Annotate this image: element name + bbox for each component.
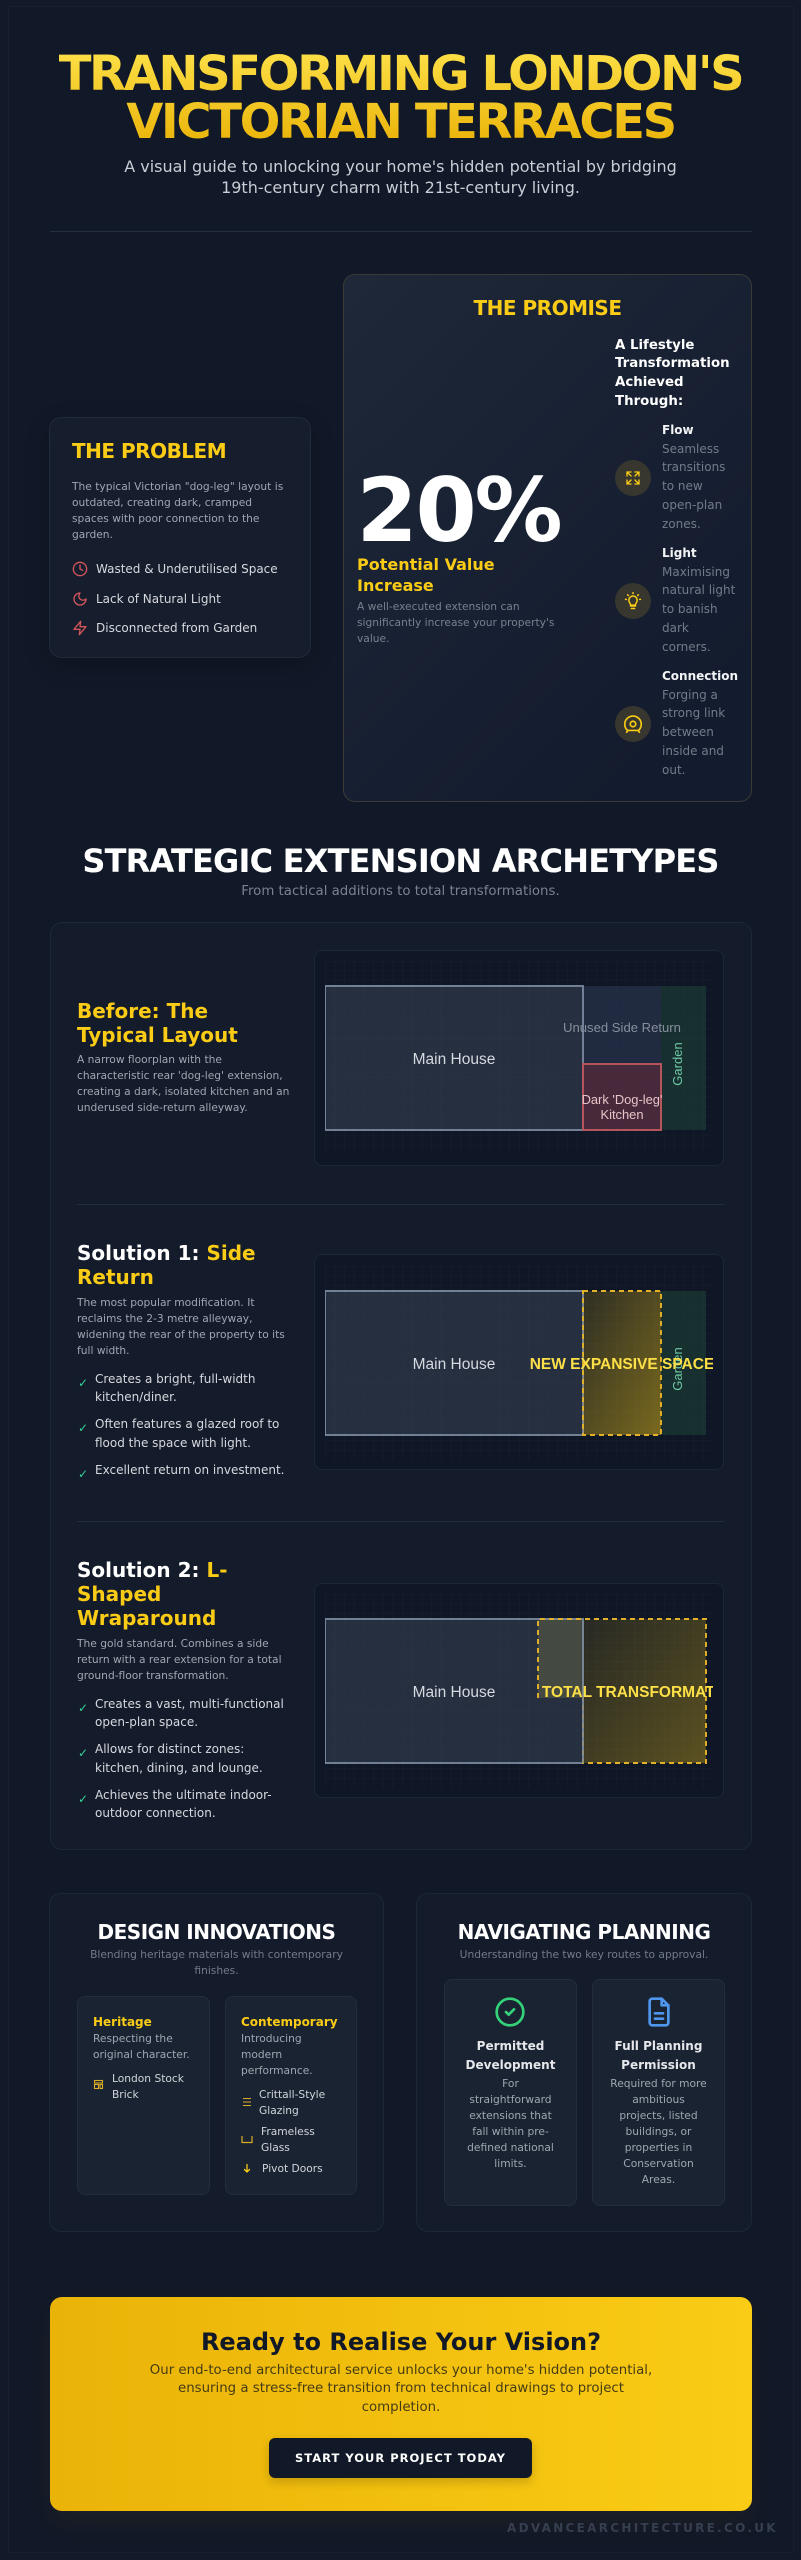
check item: Achieves the ultimate indoor- [95,1788,272,1802]
check item [78,1417,279,1450]
unused side return [583,986,661,1130]
heading: the promise: THE PROMISE [474,296,621,320]
panel: the problem [49,417,311,658]
header [59,46,742,197]
benefit text: inside and [662,744,724,758]
main house [325,1619,583,1763]
title: VICTORIAN TERRACES [126,94,675,150]
archetype description: creating a dark, isolated kitchen and an [77,1085,289,1098]
icon: clock [72,562,88,576]
button label: START YOUR PROJECT TODAY [295,2451,506,2465]
statistic description [357,600,554,645]
problem description [72,480,283,541]
card text: performance. [241,2064,313,2077]
label: main house: Main House [413,1684,495,1701]
label [261,2124,315,2156]
benefit text: zones. [662,517,701,531]
CTA text: completion. [362,2400,440,2415]
card heading: Permitted [477,2039,544,2053]
benefit text [662,546,736,654]
benefit text: dark [662,621,689,635]
problem item: disconnected [73,620,257,636]
statistic description: significantly increase your property's [357,616,554,629]
benefit text: Forging a [662,688,718,702]
archetype description: return with a rear extension for a total [77,1653,282,1666]
card heading: Permission [621,2058,696,2072]
benefit list [78,1372,284,1481]
label: Glass [261,2141,290,2154]
card heading: Contemporary [241,2015,338,2029]
archetype heading: Wraparound [77,1606,216,1630]
check item: Creates a vast, multi-functional [95,1697,284,1711]
archetype: solution 1 [76,1241,285,1481]
card text: straightforward [469,2093,552,2106]
archetype description: reclaims the 2-3 metre alleyway, [77,1312,252,1325]
CTA heading: Ready to Realise Your Vision? [201,2328,601,2356]
card text [593,2076,724,2188]
benefit text: between [662,725,714,739]
CTA button [269,2438,532,2478]
statistic label [357,555,495,595]
card: full planning permission [592,1979,725,2206]
title [0,50,801,146]
label: main house: Main House [413,1051,495,1068]
heading: NAVIGATING PLANNING [458,1920,710,1944]
card text: modern [241,2048,282,2061]
benefit text: transitions [662,460,725,474]
archetype description: ground-floor transformation. [77,1669,229,1682]
footer credit: ADVANCEARCHITECTURE.CO.UK [507,2521,778,2535]
CTA text: Our end-to-end architectural service unlocks your home's hidden potential, [150,2362,652,2378]
heading: DESIGN INNOVATIONS [98,1920,335,1944]
material: pivot [241,2161,351,2177]
archetype heading [77,1558,228,1630]
card heading [593,2037,724,2074]
archetype heading: Before: The [77,999,208,1023]
benefit text: open-plan [662,498,722,512]
subtitle [124,157,677,197]
icon: moon [73,592,87,606]
card text: fall within pre- [472,2125,549,2138]
label: new space: NEW EXPANSIVE SPACE [530,1356,713,1373]
archetype heading: Solution 1: Side [77,1241,256,1265]
icon: check circle [494,1996,526,2028]
check item: outdoor connection. [95,1806,216,1820]
label: London Stock [112,2072,184,2085]
label: kitchen: Dark 'Dog-leg' [582,1092,662,1107]
subheading: From tactical additions to total transformations. [241,884,560,899]
card heading [445,2037,576,2074]
label: main house: Main House [413,1356,495,1373]
benefit text [662,423,725,531]
check item: flood the space with light. [95,1436,251,1450]
archetype heading: Shaped [77,1582,161,1606]
label: garden: Garden [670,1042,685,1086]
card text: Respecting the [93,2032,173,2045]
problem description: The typical Victorian "dog-leg" layout is [72,480,283,493]
main house [325,986,583,1130]
icon: lines [242,2097,252,2107]
icon: brick [94,2080,104,2090]
label: unused side return: Unused Side Return [563,1020,681,1035]
lifestyle heading [615,338,730,409]
archetype heading [77,1241,256,1289]
check item: ✓ [78,1701,88,1715]
card text: Required for more [610,2077,707,2090]
floorplan diagram: solution 2 [314,1583,724,1798]
card text: Areas. [642,2173,675,2186]
lifestyle heading: Transformation [615,356,730,371]
statistic label: Potential Value [357,555,495,574]
card heading: Heritage [93,2015,152,2029]
problem description: outdated, creating dark, cramped [72,496,252,509]
archetype: before [77,999,289,1114]
benefit text: strong link [662,706,725,720]
archetype heading: Return [77,1265,154,1289]
new side extension [583,1291,661,1435]
archetype description: widening the rear of the property to its [77,1328,285,1341]
heading text: STRATEGIC EXTENSION ARCHETYPES [82,842,719,880]
garden [661,986,706,1130]
check item: ✓ [78,1746,88,1760]
benefit: connection [615,669,738,777]
benefit text: Light [662,546,697,560]
label: Disconnected from Garden [96,621,257,635]
label: Crittall-Style [259,2088,325,2101]
icon: document [643,1996,675,2028]
card: permitted development [444,1979,577,2206]
subtitle: 19th-century charm with 21st-century living. [221,178,580,197]
card text [445,2076,576,2172]
heading: the problem: THE PROBLEM [72,439,226,463]
label: Brick [112,2088,139,2101]
card text: Introducing [241,2032,302,2045]
icon: arrow [242,2163,252,2174]
benefit text: Flow [662,423,694,437]
check item: Excellent return on investment. [95,1463,284,1477]
problem item: lack of light [73,592,221,606]
check item: Often features a glazed roof to [95,1417,279,1431]
icon: expand arrows [615,460,651,496]
lifestyle heading: A Lifestyle [615,338,694,352]
benefit text: to banish [662,602,718,616]
card text: buildings, or [626,2125,691,2138]
statistic description: A well-executed extension can [357,600,520,613]
check item: Creates a bright, full-width [95,1372,255,1386]
statistic label: Increase [357,576,434,595]
check item: open-plan space. [95,1715,198,1729]
archetype: solution 2 [76,1558,284,1820]
main house [325,1291,583,1435]
card text [93,2032,190,2061]
benefit text: to new [662,479,703,493]
archetype heading: Solution 2: L- [77,1558,228,1582]
benefit text [662,669,738,777]
benefit text: out. [662,763,685,777]
card text: defined national [467,2141,554,2154]
label [112,2071,184,2103]
lifestyle heading: Achieved [615,375,684,390]
material: brick [94,2072,184,2101]
check item: kitchen/diner. [95,1390,177,1404]
floorplan diagram: before [314,950,724,1166]
floorplan diagram: solution 1 [314,1254,724,1470]
check item: ✓ [78,1376,88,1390]
subheading [90,1948,343,1977]
card text: properties in [625,2141,692,2154]
card heading: Full Planning [615,2039,702,2053]
subheading: finishes. [194,1964,239,1977]
archetype heading [77,999,238,1047]
check item [78,1372,255,1404]
benefit text: corners. [662,640,711,654]
archetype description: A narrow floorplan with the [77,1053,222,1066]
problem description: garden. [72,528,113,541]
check item [78,1697,284,1729]
garden [661,1291,706,1435]
section heading [82,842,719,899]
problem description: spaces with poor connection to the [72,512,259,525]
label: kitchen: Kitchen [600,1107,644,1122]
benefit text: natural light [662,583,735,597]
icon: bolt [73,620,87,636]
call to action [50,2297,752,2511]
card text: projects, listed [619,2109,698,2122]
lifestyle heading: Through: [615,394,683,409]
benefit text: Maximising [662,565,730,579]
label: Wasted & Underutilised Space [96,562,278,576]
CTA text: ensuring a stress-free transition from technical drawings to project [178,2381,624,2396]
card text [241,2031,313,2079]
archetype description: The gold standard. Combines a side [77,1637,269,1650]
icon: frame [241,2135,253,2144]
card text: Conservation [623,2157,694,2170]
panel: navigating planning [416,1893,752,2232]
benefit text: Seamless [662,442,719,456]
label: Glazing [259,2104,299,2117]
panel: design innovations [49,1893,384,2232]
panel: the promise [343,274,752,802]
card text: For [502,2077,519,2090]
subheading: Understanding the two key routes to approval. [460,1948,708,1961]
archetype heading: Typical Layout [77,1023,238,1047]
check item: kitchen, dining, and lounge. [95,1761,263,1775]
check item: Allows for distinct zones: [95,1742,244,1756]
material: glazing [241,2087,351,2119]
check item [78,1788,272,1820]
title: TRANSFORMING LONDON'S [59,46,742,102]
label [259,2087,325,2119]
benefit: light [615,546,736,654]
statistic description: value. [357,632,390,645]
archetype description [77,1053,289,1114]
archetype description [76,1296,285,1357]
check item [78,1742,263,1775]
card text: extensions that [469,2109,552,2122]
card: contemporary [225,1996,357,2195]
panel: extension archetypes [50,922,752,1850]
archetype description: characteristic rear 'dog-leg' extension, [77,1069,283,1082]
icon: light bulb [615,583,651,619]
benefit: flow [615,423,725,531]
label: garden: Garden [670,1347,685,1391]
label: Lack of Natural Light [96,592,221,606]
archetype description [76,1637,282,1682]
card: heritage [77,1996,210,2195]
subtitle: A visual guide to unlocking your home's hidden potential by bridging [124,157,677,176]
card heading: Development [466,2058,555,2072]
material: frameless [241,2124,351,2156]
icon: connection [615,706,651,742]
label: Frameless [261,2125,315,2138]
archetype description: full width. [77,1344,130,1357]
problem item: wasted space [72,562,278,576]
kitchen [583,1064,661,1130]
statistic: 20%: 20% [356,459,561,562]
CTA text [50,2362,752,2418]
label: Pivot Doors [262,2162,323,2175]
card text: ambitious [632,2093,685,2106]
card text: limits. [494,2157,527,2170]
archetype description: underused side-return alleyway. [77,1101,248,1114]
check item: ✓ [78,1421,88,1435]
benefit text: Connection [662,669,738,683]
check item: ✓ [78,1792,88,1806]
L-shaped extension [538,1619,706,1763]
benefit list [78,1697,284,1820]
subheading: Blending heritage materials with contemporary [90,1948,343,1961]
check item: ✓ [78,1467,88,1481]
card text: original character. [93,2048,190,2061]
archetype description: The most popular modification. It [77,1296,255,1309]
